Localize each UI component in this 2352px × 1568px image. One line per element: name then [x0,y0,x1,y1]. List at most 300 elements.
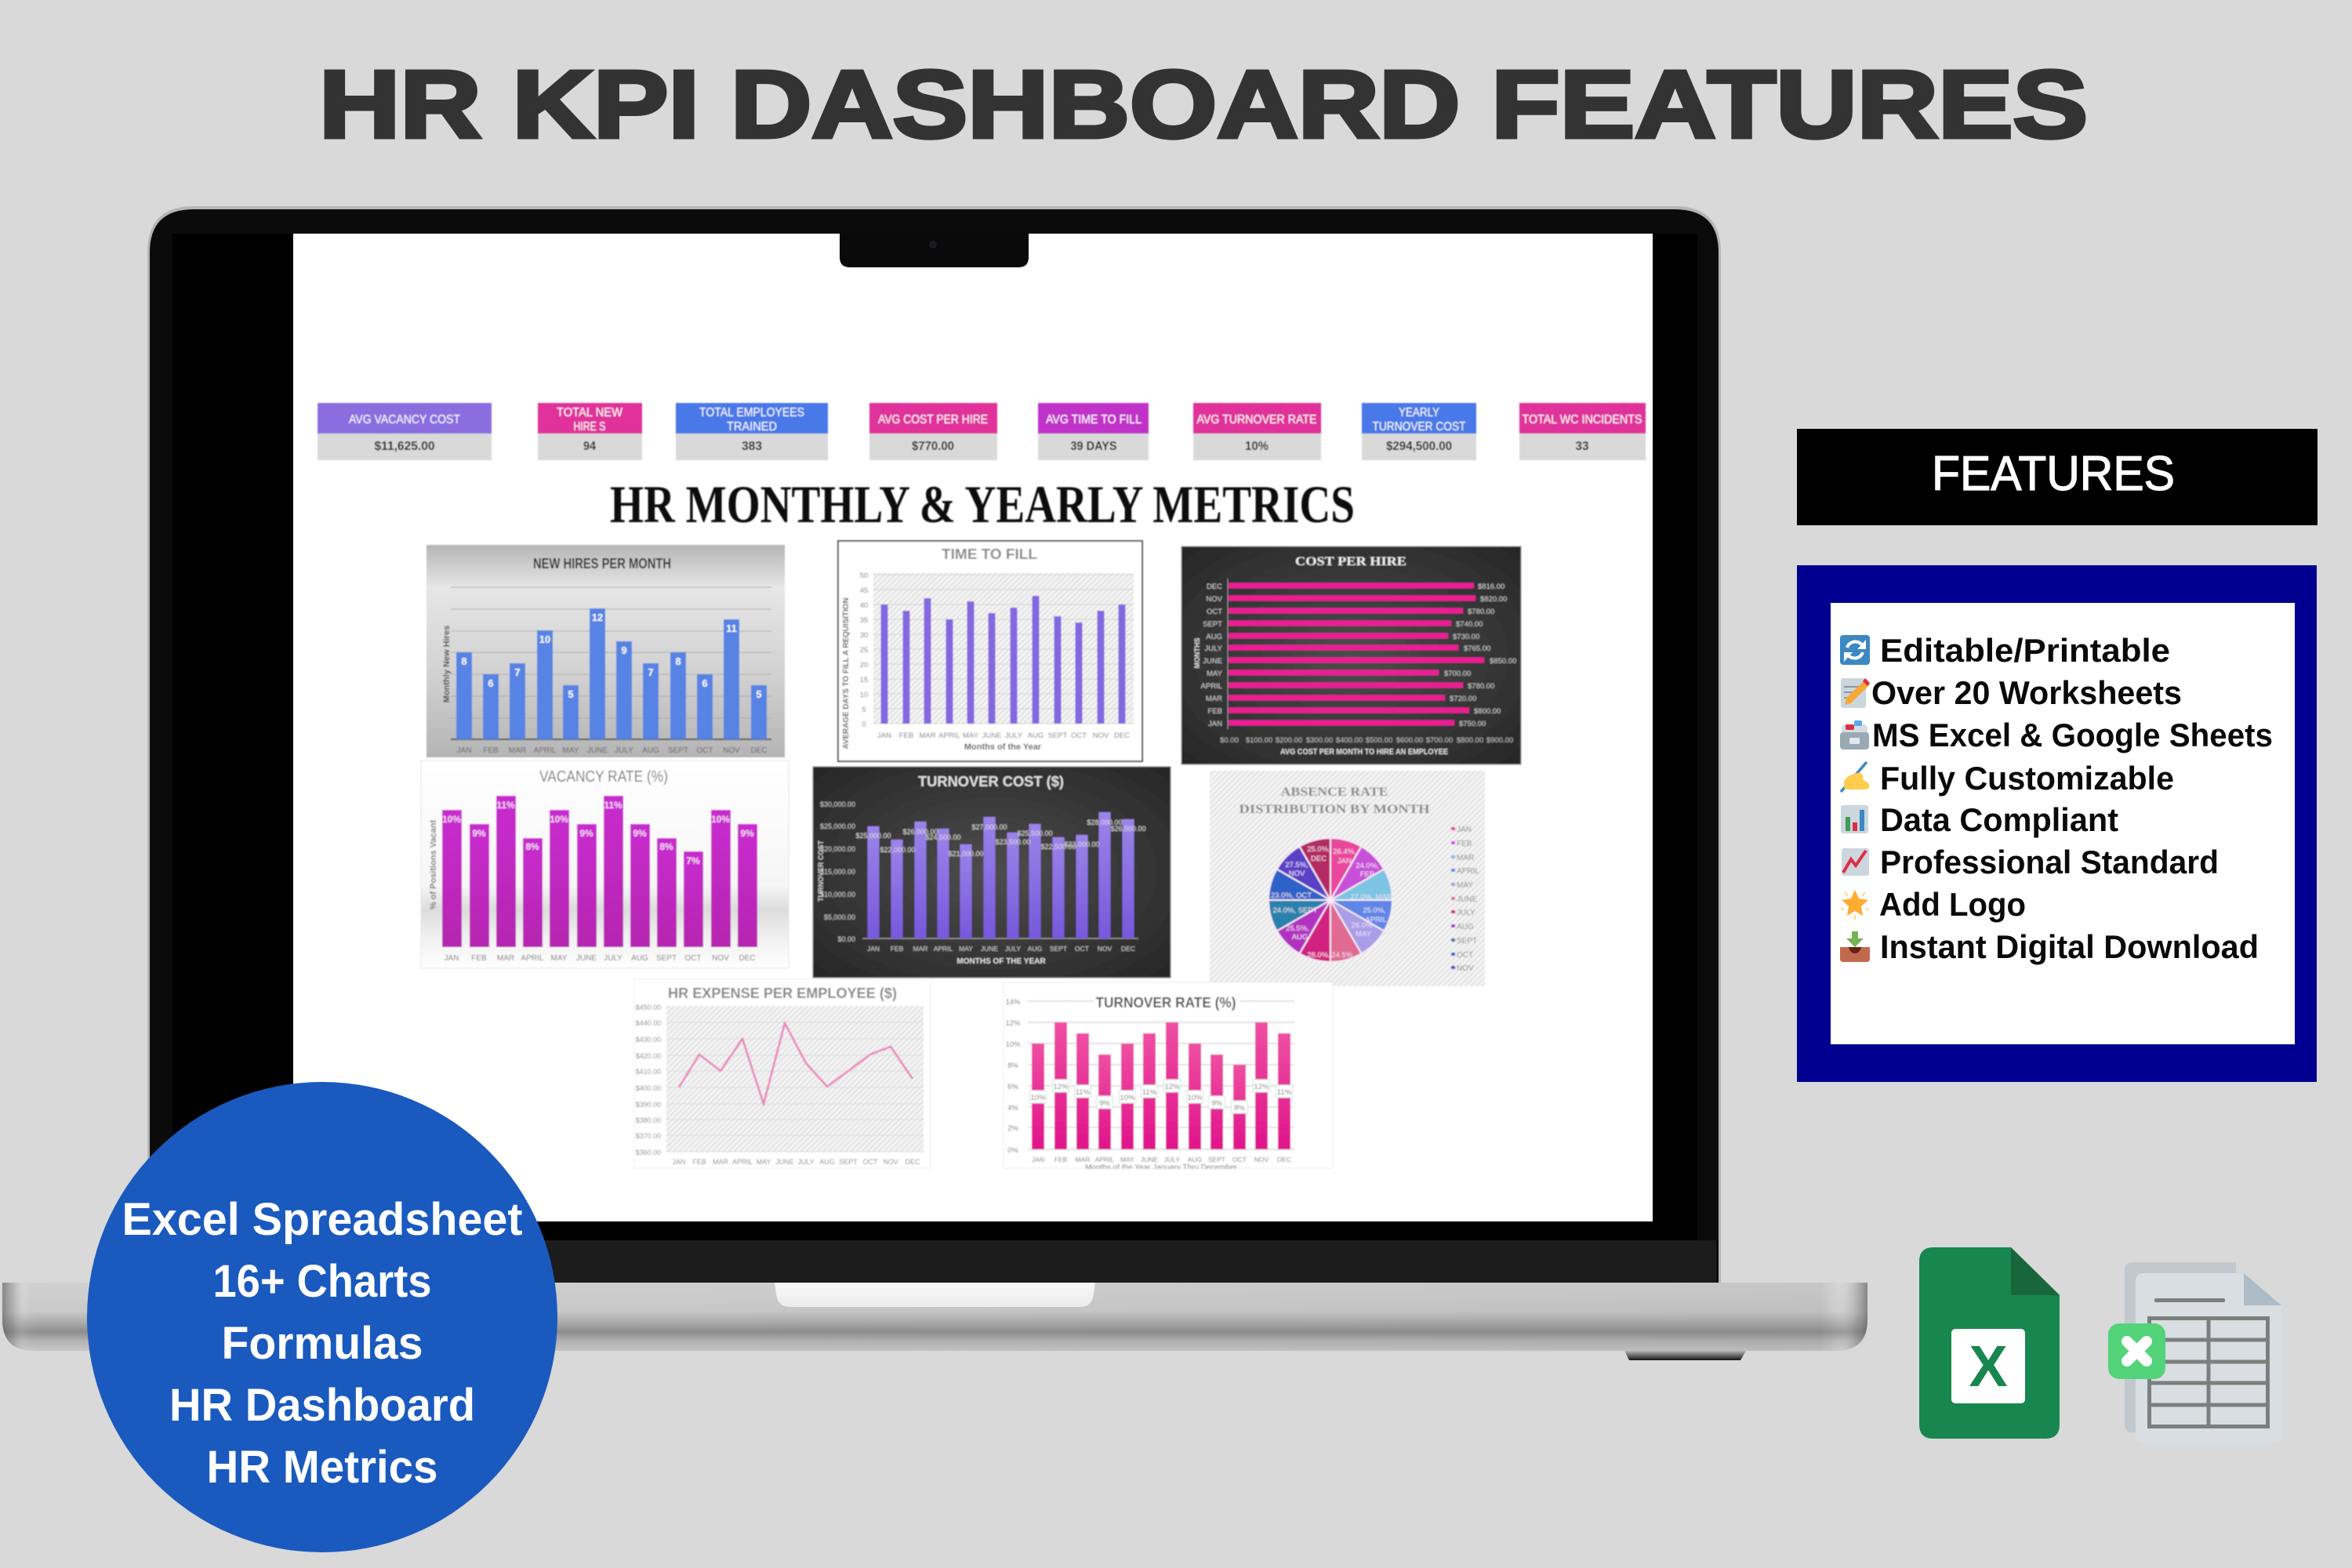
chart: turnover cost: $23,500.00 [995,838,1031,846]
chart: hr expense per employee: AUG [819,1158,835,1166]
chart: new hires per month: SEPT [668,746,688,755]
chart: vacancy rate: 11% [496,800,515,811]
KPI: avg vacancy cost [318,403,492,460]
chart: absence rate pie: 23.0%, OCT [1271,891,1312,900]
chart: absence rate pie: NOV [1289,869,1305,878]
chart: hr expense per employee: OCT [862,1158,878,1166]
chart: turnover rate: 9% [1099,1099,1110,1108]
chart: time to fill: MAR [919,731,936,740]
pie legend: AUG [1457,923,1474,931]
chart: cost per hire: $740.00 [1456,620,1483,629]
laptop lid [147,206,1721,1283]
chart: new hires per month: 10 [539,633,550,645]
chart: time to fill: 20 [860,661,868,670]
chart: hr expense per employee: MAY [757,1158,771,1166]
title: HR KPI DASHBOARD FEATURES [319,51,2088,158]
feature: editable printable: Editable/Printable [1880,632,2170,669]
chart: time to fill: JUNE [982,731,1001,740]
chart: turnover rate: 12% [1164,1083,1180,1091]
chart: vacancy rate: SEPT [656,954,677,963]
chart: turnover cost: TURNOVER COST [817,840,825,902]
chart: cost per hire: $600.00 [1396,736,1423,745]
chart: vacancy rate: AUG [631,954,648,963]
chart: vacancy rate: MAR [497,954,514,963]
chart: new hires per month: 12 [592,612,603,623]
chart: turnover cost: $22,000.00 [880,846,916,854]
chart: turnover cost: $27,000.00 [971,823,1007,831]
chart: turnover cost: JULY [1005,945,1021,953]
KPI: yearly turnover cost: TURNOVER COST [1372,420,1466,434]
chart: turnover rate: Months of the Year January Thru December [1085,1163,1238,1172]
pie legend: SEPT [1457,937,1477,946]
chart: turnover rate: 12% [1254,1083,1269,1091]
chart: absence rate pie: 25.0%, [1307,845,1330,854]
chart: vacancy rate: 10% [711,814,730,825]
chart: hr expense per employee: JUNE [775,1158,794,1166]
features heading: FEATURES [1932,447,2175,501]
KPI: total wc incidents [1519,403,1646,460]
chart: hr expense per employee: $410.00 [636,1068,661,1076]
chart: turnover rate: 10% [1005,1040,1021,1049]
chart: absence rate pie: 27.5%, [1285,861,1308,869]
KPI: total new hires [538,403,642,460]
chart: absence rate pie: APRIL [1365,916,1387,924]
chart: vacancy rate: 11% [604,800,622,811]
chart: turnover cost: OCT [1075,945,1089,953]
icon: excel file: X [1969,1334,2008,1399]
chart: cost per hire: MAR [1206,695,1222,703]
chart: vacancy rate: JULY [604,954,622,963]
chart: absence rate pie: 25.0%, [1363,906,1386,915]
chart: cost per hire: $800.00 [1457,736,1483,745]
chart: absence rate pie: ABSENCE RATE [1281,786,1388,799]
chart: turnover cost: JAN [867,945,880,953]
chart: turnover cost: $23,000.00 [1064,840,1100,848]
features panel [1797,565,2317,1082]
chart: vacancy rate: % of Positions Vacant [429,820,438,909]
KPI: total new hires: HIRE S [574,420,605,434]
chart: turnover rate: 10% [1030,1094,1046,1102]
chart: turnover cost: $10,000.00 [820,891,855,898]
chart: hr expense per employee: $370.00 [636,1132,661,1140]
chart: cost per hire: $780.00 [1468,608,1494,616]
chart: vacancy rate: APRIL [521,954,544,963]
chart: absence rate pie: AUG [1292,933,1308,942]
chart: vacancy rate: 9% [633,828,647,839]
chart: vacancy rate: 9% [579,828,593,839]
chart: turnover cost: APRIL [934,945,953,953]
chart: cost per hire: MAY [1207,670,1223,678]
screen [293,234,1653,1221]
KPI: avg cost per hire: $770.00 [912,440,954,453]
chart: turnover rate: AUG [1188,1156,1202,1163]
chart: new hires per month: FEB [483,746,499,755]
chart: time to fill: 25 [860,646,868,655]
icon: excel file [1919,1247,2060,1439]
chart: cost per hire: SEPT [1203,620,1222,629]
pie legend [1451,826,1479,973]
pie legend: MAR [1457,854,1474,862]
feature: add logo: Add Logo [1879,886,2026,923]
KPI: total employees trained: 383 [742,440,762,453]
chart: cost per hire: COST PER HIRE [1295,555,1406,568]
chart: time to fill: FEB [899,731,913,740]
chart: new hires per month [426,545,785,757]
chart: turnover rate: 4% [1007,1104,1018,1112]
blue circle badge [87,1082,557,1552]
chart: cost per hire: APRIL [1201,682,1222,691]
chart: absence rate pie: DEC [1311,855,1327,863]
chart: time to fill: 50 [860,572,868,580]
chart: cost per hire: $700.00 [1426,736,1453,745]
KPI: avg turnover rate: 10% [1245,440,1269,453]
KPI: yearly turnover cost [1362,403,1476,460]
chart: turnover cost: $20,000.00 [820,845,855,853]
blue circle badge: HR Dashboard [169,1380,475,1431]
chart: turnover cost: $21,000.00 [948,850,984,858]
chart: turnover cost: $30,000.00 [820,800,855,808]
chart: absence rate pie: 28.0%, [1307,951,1330,960]
chart: absence rate pie: DISTRIBUTION BY MONTH [1239,803,1430,816]
chart: cost per hire: $750.00 [1459,720,1486,728]
KPI: total wc incidents: TOTAL WC INCIDENTS [1523,413,1642,426]
chart: turnover cost: $24,500.00 [925,833,961,841]
chart: turnover rate: APRIL [1095,1156,1115,1163]
KPI cards row [318,403,1646,460]
chart: hr expense per employee: DEC [905,1158,920,1166]
chart: new hires per month: MAR [509,746,526,755]
dashboard heading: HR MONTHLY & YEARLY METRICS [610,474,1355,534]
chart: vacancy rate: 10% [442,814,461,825]
chart: vacancy rate: JUNE [576,954,597,963]
chart: turnover rate: 11% [1142,1088,1157,1097]
chart: cost per hire: AVG COST PER MONTH TO HIRE AN EMPLOYEE [1280,748,1448,757]
chart: time to fill: 15 [860,676,868,684]
chart: vacancy rate: 7% [686,855,700,866]
laptop [2,206,1867,1360]
chart: time to fill: 40 [860,601,868,610]
chart: new hires per month: OCT [696,746,713,755]
chart: time to fill: APRIL [938,731,960,740]
chart: cost per hire: $400.00 [1336,736,1363,745]
chart: time to fill: SEPT [1048,731,1068,740]
chart: cost per hire: $850.00 [1490,657,1516,666]
chart: new hires per month: 6 [702,677,708,689]
chart: turnover rate: 2% [1007,1124,1018,1133]
chart: turnover cost: $25,000.00 [855,832,891,840]
feature: ms excel and google sheets: MS Excel & Google Sheets [1872,717,2273,753]
chart: cost per hire: $816.00 [1478,583,1504,591]
chart: vacancy rate: OCT [684,954,702,963]
chart: turnover rate: FEB [1054,1156,1068,1163]
chart: turnover cost [813,767,1171,978]
chart: cost per hire: $780.00 [1468,682,1494,691]
chart: hr expense per employee: MAR [713,1158,729,1166]
chart: turnover rate: 0% [1007,1146,1018,1155]
chart: hr expense per employee: $450.00 [636,1004,661,1011]
chart: new hires per month: 11 [726,622,737,634]
feature: fully customizable: Fully Customizable [1880,760,2174,797]
chart: absence rate pie [1210,771,1485,986]
chart: turnover rate: SEPT [1208,1156,1225,1163]
chart: turnover cost: $0.00 [837,935,855,943]
blue circle badge: HR Metrics [207,1442,437,1493]
pie legend: FEB [1457,840,1472,848]
feature: data compliant: Data Compliant [1880,801,2118,838]
chart: new hires per month: JULY [615,746,633,755]
chart: turnover rate: 10% [1187,1094,1203,1102]
chart: cost per hire: $730.00 [1453,633,1479,641]
camera notch [840,233,1029,267]
chart: absence rate pie: 26.0% [1352,921,1373,930]
chart: cost per hire: $820.00 [1480,595,1507,604]
chart: new hires per month: NOV [723,746,740,755]
chart: time to fill [838,541,1142,761]
chart: cost per hire: $900.00 [1486,736,1513,745]
dashboard content [318,403,1646,1175]
chart: time to fill: 5 [862,706,866,714]
KPI: yearly turnover cost: $294,500.00 [1386,440,1452,453]
chart: turnover rate: JUNE [1141,1156,1158,1163]
chart: turnover cost: MONTHS OF THE YEAR [956,957,1046,966]
chart: absence rate pie: 25.5%, [1286,924,1309,933]
chart: absence rate pie: FEB [1360,870,1374,879]
chart: cost per hire: FEB [1208,707,1222,716]
chart: time to fill: AUG [1028,731,1044,740]
chart: vacancy rate [421,760,789,968]
chart: time to fill: 0 [862,720,866,729]
chart: cost per hire: JAN [1208,720,1222,728]
chart: cost per hire: JUNE [1203,657,1222,666]
chart: turnover rate: 8% [1007,1062,1018,1070]
pie legend: OCT [1457,951,1473,960]
chart: absence rate pie: 27.0%, MAR [1350,893,1392,902]
chart: time to fill: 30 [860,631,868,640]
chart: absence rate pie: JAN [1338,857,1352,866]
chart: turnover cost: FEB [891,945,904,953]
chart: hr expense per employee: $390.00 [636,1101,661,1109]
chart: turnover cost: $26,000.00 [902,828,938,836]
chart: turnover rate: MAR [1076,1156,1090,1163]
chart: time to fill: 45 [860,586,868,595]
chart: hr expense per employee: FEB [692,1158,706,1166]
KPI: avg cost per hire: AVG COST PER HIRE [878,413,988,426]
chart: turnover rate: 9% [1211,1099,1222,1108]
chart: turnover rate: 12% [1053,1083,1069,1091]
chart: new hires per month: Monthly New Hires [442,626,452,702]
KPI: avg time to fill: AVG TIME TO FILL [1046,413,1142,426]
chart: turnover cost: TURNOVER COST ($) [918,774,1064,789]
chart: new hires per month: 9 [621,644,627,656]
chart: vacancy rate: 8% [659,841,673,852]
pie legend: JUNE [1457,895,1477,904]
chart: new hires per month: JUNE [587,746,608,755]
chart: hr expense per employee: $380.00 [636,1116,661,1124]
chart: vacancy rate: VACANCY RATE (%) [539,768,668,786]
laptop base [2,1283,1867,1360]
blue circle badge: Formulas [221,1318,423,1369]
chart: hr expense per employee: $440.00 [636,1019,661,1027]
chart: turnover rate [996,982,1341,1175]
KPI: total wc incidents: 33 [1576,440,1589,453]
chart: turnover rate: NOV [1254,1156,1269,1163]
chart: vacancy rate: MAY [551,954,568,963]
chart: turnover rate: 8% [1234,1104,1245,1112]
chart: hr expense per employee: APRIL [732,1158,753,1166]
chart: hr expense per employee: $430.00 [636,1036,661,1044]
chart: time to fill: 10 [860,691,868,699]
chart: cost per hire: $100.00 [1246,736,1272,745]
chart: time to fill: DEC [1114,731,1130,740]
chart: new hires per month: 8 [461,655,467,667]
chart: vacancy rate: 9% [472,828,486,839]
KPI: avg turnover rate [1193,403,1321,460]
chart: cost per hire: $700.00 [1444,670,1471,678]
chart: cost per hire: OCT [1207,608,1222,616]
chart: vacancy rate: 8% [525,841,539,852]
chart: new hires per month: 7 [648,666,654,678]
chart: turnover cost: $25,500.00 [1017,829,1053,837]
chart: turnover cost: NOV [1098,945,1112,953]
blue circle badge: Excel Spreadsheet [122,1194,522,1245]
chart: new hires per month: MAY [563,746,579,755]
pie slices [1269,838,1392,962]
chart: turnover rate: 12% [1005,1019,1021,1028]
chart: cost per hire: NOV [1206,595,1223,604]
chart: time to fill: MAY [963,731,979,740]
feature: professional standard: Professional Standard [1880,844,2219,880]
chart: cost per hire: $0.00 [1220,736,1239,745]
chart: cost per hire: MONTHS [1193,638,1201,668]
chart: cost per hire: $300.00 [1306,736,1333,745]
chart: new hires per month: 6 [488,677,494,689]
KPI: avg cost per hire [869,403,997,460]
pie legend: MAY [1457,881,1473,890]
chart: cost per hire: $500.00 [1366,736,1392,745]
chart: turnover cost: SEPT [1050,945,1067,953]
chart: time to fill: JAN [877,731,891,740]
chart: vacancy rate: DEC [739,954,756,963]
chart: cost per hire: $800.00 [1474,707,1501,716]
chart: new hires per month: APRIL [534,746,557,755]
chart: hr expense per employee: JULY [797,1158,815,1166]
chart: turnover cost: $25,000.00 [820,822,855,830]
KPI: avg turnover rate: AVG TURNOVER RATE [1196,413,1317,426]
chart: turnover cost: $26,500.00 [1110,825,1146,833]
pie legend: JULY [1457,909,1475,917]
blue circle badge: 16+ Charts [213,1256,431,1307]
chart: vacancy rate: 10% [550,814,568,825]
chart: cost per hire: $720.00 [1450,695,1476,703]
chart: new hires per month: NEW HIRES PER MONTH [533,556,671,572]
chart: new hires per month: AUG [642,746,659,755]
pie legend: APRIL [1457,867,1479,876]
chart: turnover rate: 11% [1076,1088,1091,1097]
chart: turnover cost: JUNE [981,945,998,953]
KPI: avg vacancy cost: $11,625.00 [375,440,435,453]
chart: turnover rate: 6% [1007,1083,1018,1091]
chart: cost per hire: JULY [1204,644,1223,653]
chart: time to fill: 35 [860,616,868,625]
KPI: total employees trained [676,403,828,460]
chart: cost per hire: AUG [1206,633,1222,641]
KPI: total employees trained: TOTAL EMPLOYEES [699,406,804,419]
chart: cost per hire: DEC [1207,583,1222,591]
chart: absence rate pie: 26.4%, [1333,848,1356,856]
chart: vacancy rate: 9% [740,828,754,839]
chart: hr expense per employee: $400.00 [636,1084,661,1092]
chart: turnover rate: 11% [1277,1088,1292,1097]
chart: turnover cost: MAY [959,945,973,953]
chart: turnover cost: AUG [1028,945,1042,953]
chart: absence rate pie: 24.5%, [1331,951,1355,960]
chart: time to fill: OCT [1071,731,1087,740]
chart: hr expense per employee: NOV [883,1158,898,1166]
KPI: total new hires: 94 [583,440,596,453]
chart: vacancy rate: JAN [445,954,459,963]
chart: vacancy rate: FEB [471,954,487,963]
chart: hr expense per employee [634,979,931,1168]
chart: new hires per month: 8 [675,655,681,667]
chart: time to fill: JULY [1005,731,1023,740]
feature: over 20 worksheets: Over 20 Worksheets [1871,674,2182,711]
chart: new hires per month: DEC [750,746,768,755]
chart: turnover cost: MAR [913,945,927,953]
chart: turnover rate: JULY [1164,1156,1180,1163]
chart: turnover cost: $28,000.00 [1087,818,1123,826]
KPI: avg time to fill [1038,403,1149,460]
KPI: avg time to fill: 39 DAYS [1071,440,1117,453]
chart: turnover cost: $22,500.00 [1040,843,1076,851]
chart: turnover rate: TURNOVER RATE (%) [1096,995,1236,1011]
chart: turnover cost: DEC [1121,945,1135,953]
chart: turnover cost: $5,000.00 [824,913,855,921]
chart: hr expense per employee: HR EXPENSE PER EMPLOYEE ($) [668,985,897,1001]
chart: vacancy rate: NOV [712,954,729,963]
chart: turnover rate: JAN [1032,1156,1044,1163]
pie legend: NOV [1457,964,1474,973]
chart: turnover cost: $15,000.00 [820,868,855,876]
chart: cost per hire: $200.00 [1276,736,1302,745]
chart: absence rate pie: 24.0%, [1356,862,1379,870]
chart: cost per hire: $765.00 [1464,644,1490,653]
chart: hr expense per employee: $360.00 [636,1149,661,1156]
chart: time to fill: TIME TO FILL [942,546,1037,562]
chart: turnover rate: 10% [1120,1094,1135,1102]
pie legend: JAN [1457,826,1472,834]
chart: hr expense per employee: SEPT [839,1158,858,1166]
KPI: total new hires: TOTAL NEW [557,406,623,419]
KPI: yearly turnover cost: YEARLY [1399,406,1439,419]
chart: new hires per month: 5 [568,688,574,700]
chart: time to fill: Months of the Year [964,742,1042,752]
chart: turnover rate: OCT [1232,1156,1247,1163]
chart: new hires per month: 7 [514,666,521,678]
chart: turnover rate: MAY [1120,1156,1134,1163]
chart: absence rate pie: MAY [1356,930,1372,938]
chart: time to fill: AVERAGE DAYS TO FILL A REQUISITION [842,597,851,750]
features heading [1797,429,2318,525]
chart: turnover rate: DEC [1277,1156,1291,1163]
chart: cost per hire [1181,546,1521,764]
chart: new hires per month: 5 [756,688,762,700]
chart: turnover rate: 14% [1005,998,1021,1007]
chart: new hires per month: JAN [457,746,471,755]
chart: time to fill: NOV [1093,731,1109,740]
chart: absence rate pie: 24.0%, SEPT [1272,906,1318,915]
chart: hr expense per employee: $420.00 [636,1052,661,1060]
feature: instant digital download: Instant Digital Download [1880,928,2259,965]
